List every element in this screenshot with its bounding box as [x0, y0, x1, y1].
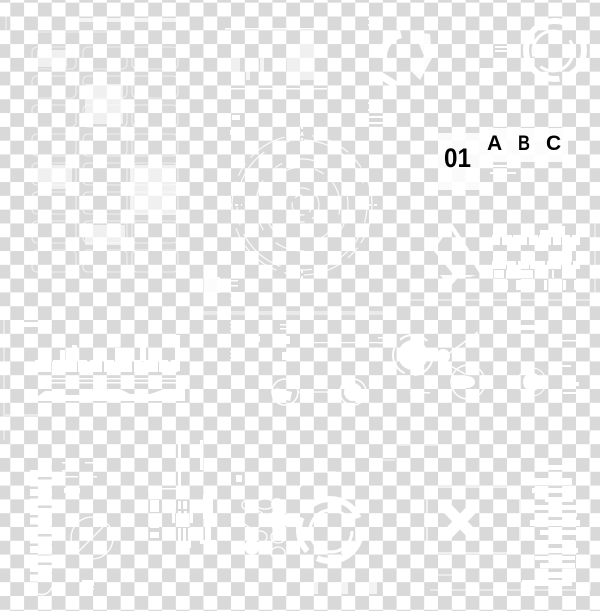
center left lines block [200, 277, 393, 360]
network: small ring node [518, 368, 546, 396]
outer frame corners [4, 210, 600, 590]
equalizer chart left [18, 322, 185, 401]
radar: concentric circles [223, 126, 380, 288]
icon: circle node left [272, 379, 298, 405]
network: big node [393, 332, 478, 375]
number 01: 01 [444, 143, 471, 173]
icon: triangle [433, 224, 483, 287]
icon: X in frame [427, 487, 520, 553]
bottom right barcode [522, 465, 580, 586]
small lines block [62, 462, 107, 590]
bar chart bottom center [148, 440, 242, 551]
network: ring node [451, 365, 485, 399]
label C: C [546, 132, 561, 155]
icon: segmented ring top right [526, 21, 584, 79]
label B: B [518, 132, 530, 155]
network right ticks [410, 325, 579, 394]
bottom center blurred labels [245, 582, 377, 594]
panel: rounded button grid [6, 8, 180, 272]
icon: dial [71, 517, 113, 559]
icon: thick ring bottom [288, 472, 361, 561]
label A: A [487, 132, 502, 155]
bottom left vertical scale [30, 462, 53, 595]
label panel background [438, 128, 568, 190]
panel: top center barcode [207, 18, 397, 135]
icon: cluster of ovals [242, 499, 287, 559]
icon: dots and dashes column [472, 36, 513, 72]
equalizer chart right [492, 226, 580, 285]
icon: broken ring [378, 30, 432, 88]
connector line [298, 391, 340, 393]
icon: circle node right [340, 379, 366, 405]
